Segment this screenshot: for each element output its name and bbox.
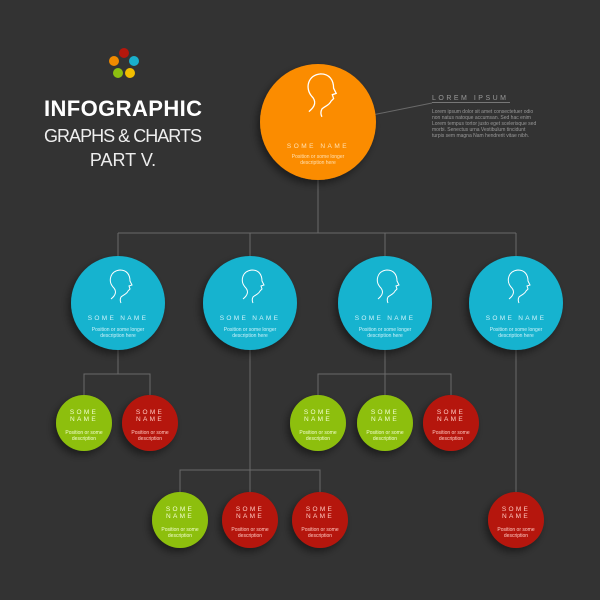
leaf nodes: description — [168, 533, 192, 539]
mid nodes: blue: Position or some longer — [224, 327, 277, 333]
leaf nodes: SOME — [306, 506, 334, 513]
title — [44, 96, 202, 170]
leaf nodes: NAME — [306, 513, 334, 520]
side text block: lorem ipsum: morbi. Senectus urna Vestibulum tincidunt — [432, 127, 526, 133]
side text block: lorem ipsum: Lorem tempus tortor justo eget scelerisque sed — [432, 121, 536, 127]
leaf nodes: description — [373, 436, 397, 442]
top node: orange — [260, 64, 376, 180]
leaf nodes: NAME — [70, 416, 98, 423]
leaf nodes: NAME — [304, 416, 332, 423]
leaf nodes: description — [238, 533, 262, 539]
mid nodes: blue: description here — [498, 333, 534, 339]
title: INFOGRAPHIC — [44, 96, 202, 121]
side text block: lorem ipsum — [432, 95, 536, 139]
leaf nodes: NAME — [136, 416, 164, 423]
mid nodes: blue: Position or some longer — [359, 327, 412, 333]
side text block: lorem ipsum: non natus natoque accumsan. Sed hac enim — [432, 115, 531, 121]
mid nodes: blue — [71, 256, 563, 350]
mid nodes: blue: description here — [367, 333, 403, 339]
top node: orange: description here — [300, 160, 336, 166]
leaf nodes: description — [439, 436, 463, 442]
mid nodes: blue: Position or some longer — [92, 327, 145, 333]
leaf nodes: description — [138, 436, 162, 442]
leaf nodes — [56, 395, 544, 548]
leaf nodes: SOME — [502, 506, 530, 513]
leaf nodes: Position or some — [65, 430, 103, 436]
leaf nodes: NAME — [371, 416, 399, 423]
leaf nodes: Position or some — [231, 527, 269, 533]
title: PART V. — [90, 150, 156, 170]
leaf nodes: description — [72, 436, 96, 442]
icon: colored dots — [109, 48, 139, 78]
leaf nodes: description — [308, 533, 332, 539]
leaf nodes: NAME — [502, 513, 530, 520]
top node: orange: Position or some longer — [292, 154, 345, 160]
leaf nodes: Position or some — [131, 430, 169, 436]
side text block: lorem ipsum: LOREM IPSUM — [432, 95, 509, 102]
leaf nodes: SOME — [371, 409, 399, 416]
top node: orange: SOME NAME — [287, 143, 349, 150]
mid nodes: blue: SOME NAME — [355, 315, 415, 322]
mid nodes: blue: SOME NAME — [88, 315, 148, 322]
mid nodes: blue: description here — [100, 333, 136, 339]
leaf nodes: Position or some — [161, 527, 199, 533]
leaf nodes: NAME — [437, 416, 465, 423]
leaf nodes: SOME — [437, 409, 465, 416]
mid nodes: blue: SOME NAME — [486, 315, 546, 322]
title: GRAPHS & CHARTS — [44, 126, 202, 146]
leaf nodes: NAME — [236, 513, 264, 520]
leaf nodes: SOME — [136, 409, 164, 416]
side text block: lorem ipsum: Lorem ipsum dolor sit amet consectetuer odio — [432, 109, 533, 115]
leaf nodes: description — [306, 436, 330, 442]
leaf nodes: Position or some — [366, 430, 404, 436]
leaf nodes: Position or some — [301, 527, 339, 533]
leaf nodes: SOME — [236, 506, 264, 513]
leaf nodes: NAME — [166, 513, 194, 520]
side text block: lorem ipsum: turpis sem magna Nam hendrerit vitae nibh. — [432, 133, 529, 139]
leaf nodes: SOME — [70, 409, 98, 416]
leaf nodes: Position or some — [299, 430, 337, 436]
leaf nodes: Position or some — [432, 430, 470, 436]
mid nodes: blue: Position or some longer — [490, 327, 543, 333]
mid nodes: blue: SOME NAME — [220, 315, 280, 322]
leaf nodes: SOME — [166, 506, 194, 513]
leaf nodes: SOME — [304, 409, 332, 416]
connector lines — [84, 103, 516, 495]
mid nodes: blue: description here — [232, 333, 268, 339]
leaf nodes: Position or some — [497, 527, 535, 533]
leaf nodes: description — [504, 533, 528, 539]
